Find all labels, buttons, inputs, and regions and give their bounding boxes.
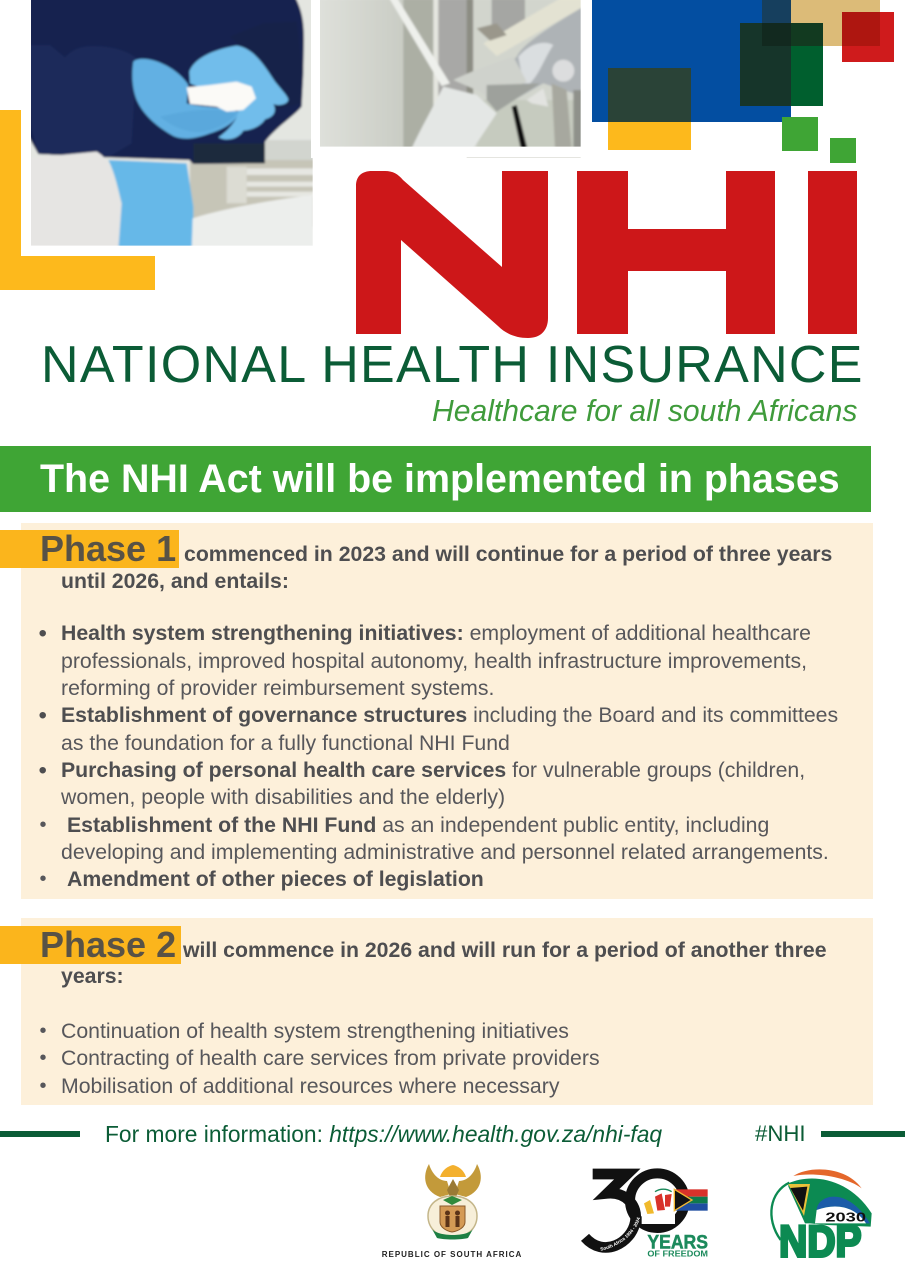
bullet: NHI Fund: •	[40, 814, 47, 836]
panel: Phase 1	[0, 523, 873, 899]
bullet: NHI Fund: developing and implementing administrative and personnel related arrangements.	[61, 840, 829, 864]
bullet: purchasing services	[38, 757, 805, 809]
decorative overlapping colour squares	[592, 0, 894, 163]
bullet: amendment of legislation: •	[40, 868, 47, 890]
tagline: Healthcare for all south Africans	[432, 395, 857, 428]
bullet: health system strengthening	[38, 620, 811, 700]
Phase 2 bullet list: •	[40, 1074, 47, 1096]
Phase 1 intro: until 2026, and entails:	[61, 569, 289, 593]
banner: NHI Act phases	[0, 446, 871, 512]
bullet: governance structures: Establishment of governance structures including the Board and its committees	[61, 703, 838, 727]
bullet: governance structures: as the foundation for a fully functional NHI Fund	[61, 730, 510, 754]
panel: Phase 2	[0, 918, 873, 1105]
Phase 2 label: Phase 2	[40, 924, 176, 965]
NHI large red letters	[356, 171, 857, 338]
bullet: amendment of legislation: Amendment of other pieces of legislation	[67, 866, 484, 890]
more information link text: For more information: https://www.health.gov.za/nhi-faq	[105, 1121, 662, 1147]
footer information line	[0, 1121, 905, 1147]
hashtag: #NHI	[755, 1121, 806, 1146]
logo: 30 Years of Freedom	[581, 1168, 708, 1259]
logo: Republic of South Africa coat of arms: REPUBLIC OF SOUTH AFRICA	[382, 1250, 522, 1259]
logo: Republic of South Africa coat of arms	[382, 1164, 522, 1259]
heading: National Health Insurance: NATIONAL HEALTH INSURANCE	[41, 336, 864, 394]
Phase 1 intro: commenced in 2023 and will continue for a period of three years	[184, 542, 832, 566]
bullet: health system strengthening: reforming of provider reimbursement systems.	[61, 676, 494, 700]
Phase 1 label: Phase 1	[40, 528, 176, 569]
photo: gloved hands holding white tablets	[31, 0, 313, 246]
bullet: health system strengthening: Health system strengthening initiatives: employment of additional healthcare	[61, 621, 811, 645]
photo: pharmaceutical manufacturing machine with white frame	[311, 0, 581, 158]
logo: NDP 2030: 2030	[825, 1210, 866, 1225]
bullet: purchasing services: •	[38, 757, 47, 784]
banner: NHI Act phases: The NHI Act will be implemented in phases	[40, 457, 840, 501]
Phase 1 gold highlight	[0, 530, 179, 568]
Phase 1 intro	[61, 542, 832, 593]
Phase 2 bullet list: •	[40, 1047, 47, 1069]
Phase 2 gold highlight	[0, 926, 181, 964]
logo: 30 Years of Freedom: YEARS	[647, 1232, 708, 1253]
logo: 30 Years of Freedom: South Africa 1994 - 2024	[600, 1217, 640, 1250]
Phase 2 bullet list: Continuation of health system strengthening initiatives	[61, 1018, 569, 1042]
bullet: health system strengthening: professionals, improved hospital autonomy, health infrastructure improvements,	[61, 648, 807, 672]
bullet: NHI Fund: Establishment of the NHI Fund as an independent public entity, including	[67, 812, 769, 836]
Phase 2 bullet list: Mobilisation of additional resources where necessary	[61, 1074, 559, 1098]
bullet: purchasing services: women, people with disabilities and the elderly)	[61, 785, 505, 809]
Phase 2 intro	[61, 938, 827, 988]
logo: 30 Years of Freedom: OF FREEDOM	[647, 1250, 708, 1259]
logo: NDP 2030	[770, 1169, 872, 1265]
bullet: governance structures	[38, 702, 838, 754]
Phase 2 intro: years:	[61, 964, 124, 988]
Phase 2 bullet list	[40, 1018, 600, 1098]
Phase 2 bullet list: •	[40, 1020, 47, 1042]
Phase 2 bullet list: Contracting of health care services from private providers	[61, 1046, 600, 1070]
bullet: health system strengthening: •	[38, 620, 47, 647]
Phase 2 intro: will commence in 2026 and will run for a period of another three	[183, 938, 827, 962]
bullet: NHI Fund	[40, 812, 829, 864]
bullet: purchasing services: Purchasing of personal health care services for vulnerable groups (children,	[61, 758, 805, 782]
decorative yellow corner bracket	[0, 110, 155, 290]
bullet: governance structures: •	[38, 702, 47, 729]
